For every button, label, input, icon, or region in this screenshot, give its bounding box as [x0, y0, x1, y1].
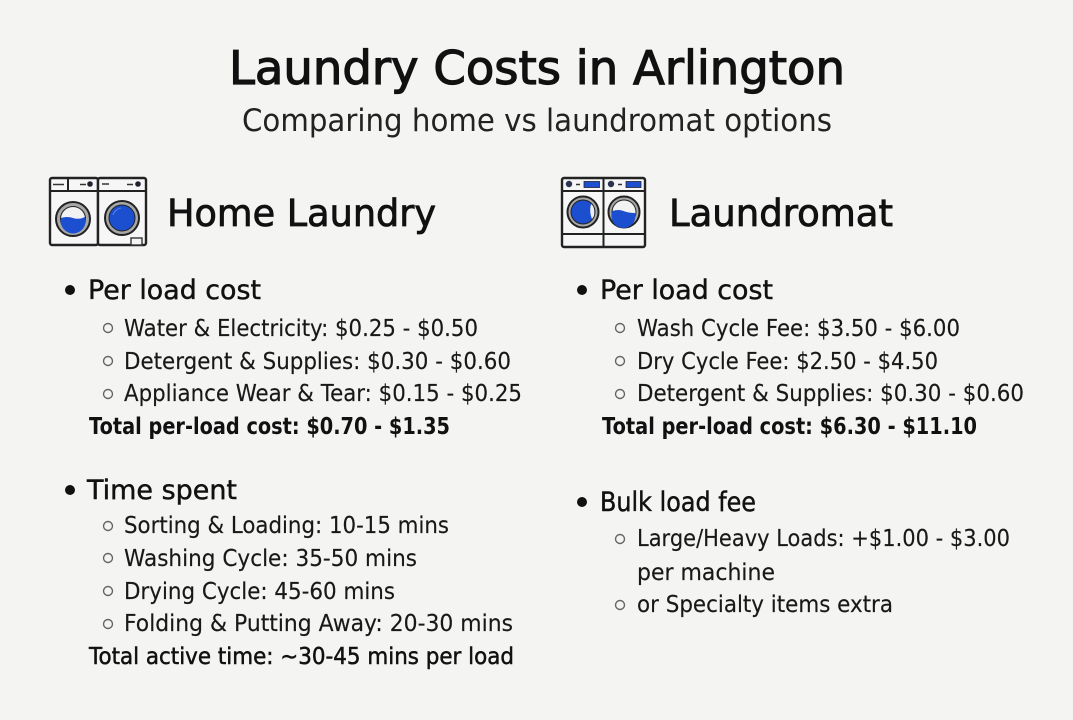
subtitle: Comparing home vs laundromat options — [242, 103, 832, 139]
section: laundromat per load cost: Dry Cycle Fee: $2.50 - $4.50 — [637, 349, 938, 375]
section: home time spent: Total active time: ~30-45 mins per load — [88, 644, 514, 670]
section: home time spent — [65, 475, 514, 670]
section: home per load cost: Detergent & Supplies: $0.30 - $0.60 — [124, 349, 511, 375]
section: home per load cost: Appliance Wear & Tear: $0.15 - $0.25 — [124, 381, 522, 407]
section: bulk load fee: or Specialty items extra — [637, 592, 893, 618]
icon: laundromat machines — [562, 178, 645, 247]
section: bulk load fee: Bulk load fee — [600, 487, 756, 518]
section: home time spent: Drying Cycle: 45-60 mins — [124, 579, 395, 605]
section: bulk load fee — [577, 487, 1010, 618]
section: home per load cost — [65, 275, 522, 440]
panel: laundromat — [562, 178, 1024, 618]
section: home per load cost: Per load cost — [88, 275, 261, 306]
section: home time spent: Folding & Putting Away: 20-30 mins — [124, 611, 513, 637]
heading: laundromat: Laundromat — [669, 192, 893, 235]
section: home time spent: Time spent — [86, 475, 237, 506]
panel: home laundry — [50, 178, 522, 670]
title: Laundry Costs in Arlington — [229, 41, 845, 95]
section: home time spent: Sorting & Loading: 10-15 mins — [124, 513, 449, 539]
section: laundromat per load cost — [577, 275, 1024, 440]
section: home per load cost: Water & Electricity: $0.25 - $0.50 — [124, 316, 478, 342]
section: laundromat per load cost: Per load cost — [600, 275, 773, 306]
section: laundromat per load cost: Wash Cycle Fee: $3.50 - $6.00 — [637, 316, 960, 342]
section: home per load cost: Total per-load cost: $0.70 - $1.35 — [89, 414, 450, 440]
section: bulk load fee: Large/Heavy Loads: +$1.00 - $3.00 — [637, 526, 1010, 552]
section: bulk load fee: per machine — [637, 560, 775, 586]
section: home time spent: Washing Cycle: 35-50 mins — [124, 546, 417, 572]
section: laundromat per load cost: Total per-load cost: $6.30 - $11.10 — [602, 414, 977, 440]
heading: home laundry: Home Laundry — [167, 192, 436, 235]
icon: home washer and dryer — [50, 178, 146, 245]
section: laundromat per load cost: Detergent & Supplies: $0.30 - $0.60 — [637, 381, 1024, 407]
